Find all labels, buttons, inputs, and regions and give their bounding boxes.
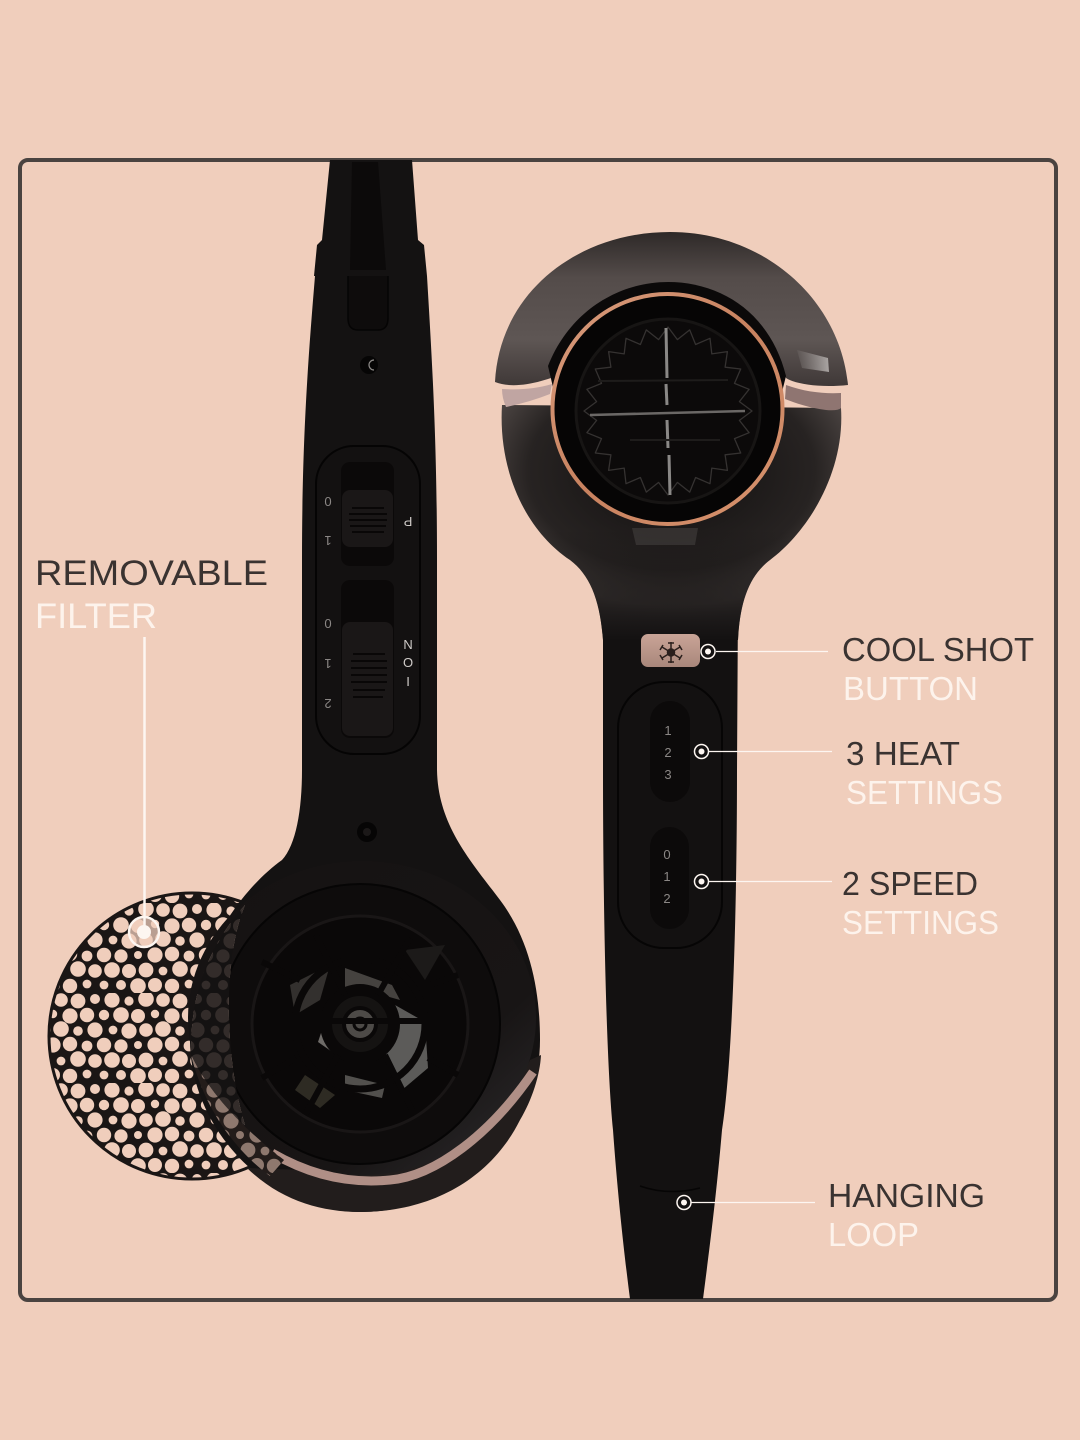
rear panel numbers: 1: [324, 533, 332, 548]
rose band: [272, 1072, 533, 1181]
hair dryer: rear view with filter: [188, 160, 541, 1212]
rear panel numbers: N: [403, 637, 413, 652]
cord highlights: [350, 162, 386, 270]
screw bottom: [357, 822, 377, 842]
callout: 2 speed settings: [694, 865, 999, 941]
callout: cool shot button: BUTTON: [843, 670, 978, 707]
heat switch: 2: [664, 745, 672, 760]
handle rear body: [190, 276, 540, 1212]
hair dryer: front view: [495, 232, 848, 1299]
rear face: [188, 861, 536, 1175]
heat switch: [650, 701, 690, 802]
cord and strain relief: [314, 160, 427, 276]
rear panel numbers: [324, 494, 413, 711]
nozzle cross: [666, 328, 670, 495]
rear panel numbers: 1: [324, 656, 332, 671]
callout: removable filter: [35, 554, 268, 947]
hood inner shadow: [548, 282, 786, 400]
bottom imprint: [632, 528, 698, 545]
brand mark: [797, 350, 829, 372]
speed switch: 2: [663, 891, 671, 906]
front switch panel: [618, 682, 722, 948]
removable filter mesh: [49, 893, 335, 1179]
filter overlap on dryer: [191, 905, 284, 1176]
heat switch: 3: [664, 767, 672, 782]
neck shadow: [552, 545, 786, 640]
handle front: [603, 600, 738, 1299]
cool shot button: [641, 634, 700, 667]
rear panel numbers: 0: [324, 616, 332, 631]
fan blades: [290, 945, 445, 1108]
grille: [256, 935, 458, 1115]
callout: removable filter: REMOVABLE: [35, 554, 268, 593]
callout: 3 heat settings: [694, 735, 1003, 811]
rear panel numbers: O: [403, 655, 413, 670]
rear panel numbers: P: [404, 514, 412, 529]
callout: cool shot button: COOL SHOT: [842, 631, 1034, 668]
rear panel numbers: 2: [324, 696, 332, 711]
callout: removable filter: FILTER: [35, 597, 157, 636]
callout: cool shot button: [701, 631, 1034, 707]
callout: hanging loop: LOOP: [828, 1216, 919, 1253]
speed switch: 0: [663, 847, 671, 862]
slider ION: [341, 580, 394, 738]
upper hood: [495, 232, 848, 386]
rose stripe right: [785, 385, 841, 410]
callout: 2 speed settings: 2 SPEED: [842, 865, 978, 902]
rear switch panel: [316, 446, 420, 754]
rose stripe left: [502, 384, 552, 407]
callout: 3 heat settings: SETTINGS: [846, 774, 1003, 811]
speed switch: 1: [663, 869, 671, 884]
callout: hanging loop: HANGING: [828, 1177, 985, 1214]
nozzle wavy grille: [584, 327, 752, 495]
callout: 3 heat settings: 3 HEAT: [846, 735, 960, 772]
frame: [20, 160, 1056, 1300]
rear panel numbers: I: [406, 674, 410, 689]
rear panel numbers: 0: [324, 494, 332, 509]
nozzle copper ring: [552, 294, 782, 524]
callout: hanging loop: [677, 1177, 985, 1253]
icon: snowflake: [660, 642, 682, 663]
slider P: [341, 462, 394, 566]
screw top: [360, 356, 378, 374]
intake rim: [220, 884, 500, 1164]
callout: 2 speed settings: SETTINGS: [842, 904, 999, 941]
speed switch: [650, 827, 689, 929]
heat switch: 1: [664, 723, 672, 738]
neck and lower sphere: [502, 405, 841, 640]
lower shell: [247, 1055, 541, 1212]
hanging loop seam: [640, 1186, 700, 1192]
